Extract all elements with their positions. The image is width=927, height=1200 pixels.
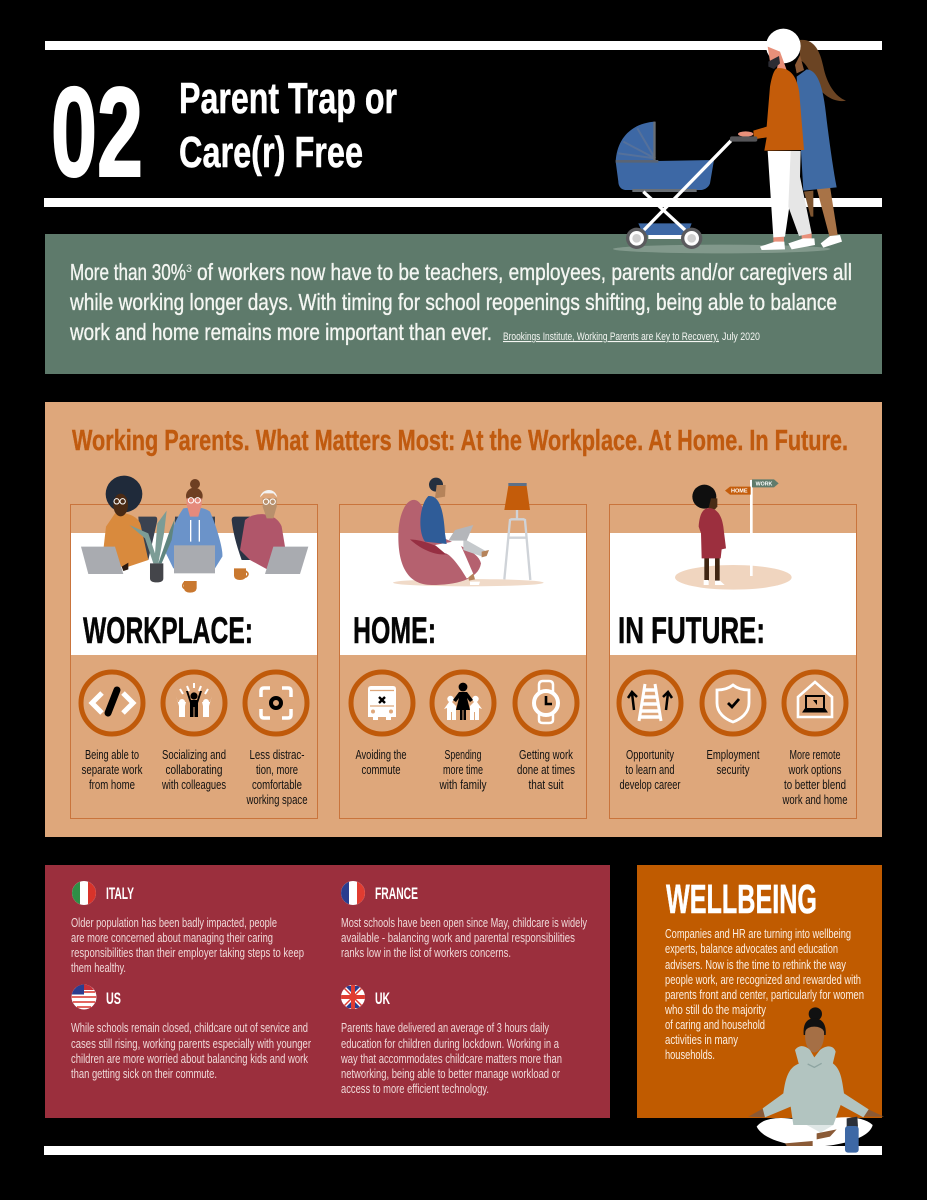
country: US: than getting sick on their commute. [71,1067,217,1081]
caption: less distraction: tion, more [256,763,298,777]
country: UK: Parents have delivered an average of 3 hours daily [341,1021,550,1035]
caption: family time [439,748,487,792]
icon: separate work from home [81,672,143,734]
caption: commute: commute [362,763,401,777]
country: Italy: ITALY [106,884,134,903]
panel: workplace [70,476,318,818]
icon: watch [515,672,577,734]
section number: 02 [51,61,143,203]
illustration: meditating woman [748,1007,884,1153]
illustration: person at signpost: HOME [731,489,748,495]
caption: flexible times: that suit [528,778,564,792]
title: Care(r) Free [179,128,363,177]
heading: workplace: WORKPLACE: [83,610,253,651]
panel: in future [610,479,856,818]
country: UK: networking, being able to better manage workload or [341,1067,560,1081]
caption: socializing: collaborating [166,763,223,777]
icon: Italy flag [72,881,96,905]
caption: flexible times: done at times [517,763,575,777]
caption: security [706,748,760,777]
country: US [71,989,311,1081]
country: Italy [71,884,304,975]
caption: socializing [161,748,226,792]
country: US: US [106,989,121,1008]
caption: commute: Avoiding the [356,748,407,762]
caption: family time: with family [439,778,487,792]
caption: separate work [82,748,143,792]
icon: remote work house [784,672,846,734]
illustration: person on beanbag [393,478,544,586]
panel: intro statement: July 2020 [722,331,760,343]
wellbeing text [664,927,864,1062]
caption: separate work: from home [89,778,135,792]
wellbeing text: parents front and center, particularly for women [665,988,864,1002]
wellbeing text: households. [665,1048,715,1062]
wellbeing text: activities in many [665,1033,739,1047]
illustration: person at signpost [675,479,792,590]
country: UK [340,989,562,1096]
country: Italy: are more concerned about managing their caring [71,931,273,945]
title [179,74,397,177]
icon: ladder [619,672,681,734]
icon: UK flag [341,985,365,1009]
country: France: available - balancing work and parental responsibilities [341,931,575,945]
caption: remote options: work and home [782,793,848,807]
panel: what matters most [45,402,882,837]
country: France: FRANCE [375,884,418,903]
panel: intro statement: 3 [186,263,192,275]
country: US: While schools remain closed, childcare out of service and [71,1021,308,1035]
country: Italy: them healthy. [71,961,126,975]
panel: wellbeing [637,865,882,1118]
country: UK: education for children during lockdown. Working in a [341,1037,559,1051]
caption: commute [356,748,407,777]
illustration: family with pram [613,29,846,253]
title: Parent Trap or [179,74,397,123]
caption: less distraction: comfortable [252,778,302,792]
caption: socializing: Socializing and [162,748,226,762]
icon: France flag [341,881,365,905]
icon: less distraction [245,672,307,734]
caption: separate work: separate work [82,763,143,777]
country: UK: UK [375,989,390,1008]
caption: family time: more time [443,763,483,777]
caption: remote options [782,748,848,807]
country: Italy: responsibilities than their employer taking steps to keep [71,946,304,960]
caption: flexible times: Getting work [519,748,574,762]
wellbeing text: Companies and HR are turning into wellbeing [665,927,851,941]
panel: intro statement [45,234,882,374]
country: UK: access to more efficient technology. [341,1082,489,1096]
country: France [341,884,588,960]
panel: intro statement: Brookings Institute, Working Parents are Key to Recovery, [503,331,719,343]
heading: in future: IN FUTURE: [618,610,765,651]
wellbeing text: experts, balance advocates and education [665,942,838,956]
caption: less distraction [246,748,308,807]
caption: less distraction: working space [246,793,308,807]
country: US: children are more worried about balancing kids and work [71,1052,309,1066]
wellbeing text: advisers. Now is the time to rethink the way [665,958,847,972]
panel: home [340,478,586,818]
caption: career: Opportunity [626,748,675,762]
wellbeing text: of caring and household [665,1018,765,1032]
caption: career [620,748,680,792]
caption: security: Employment [706,748,760,762]
country: US: cases still rising, working parents especially with younger [71,1037,311,1051]
panel: intro statement: work and home remains more important than ever. [69,319,492,345]
caption: family time: Spending [444,748,482,762]
icon: US flag [72,984,96,1010]
caption: flexible times [517,748,575,792]
panel: country insights [45,865,610,1118]
caption: career: to learn and [626,763,675,777]
caption: remote options: More remote [790,748,841,762]
caption: socializing: with colleagues [161,778,226,792]
illustration: colleagues at laptops [81,476,308,593]
wellbeing text: people work, are recognized and rewarded with [665,973,861,987]
wellbeing text: who still do the majority [664,1003,767,1017]
caption: career: develop career [620,778,680,792]
heading: home: HOME: [353,610,436,651]
country: Italy: Older population has been badly impacted, people [71,916,277,930]
country: France: ranks low in the list of workers concerns. [341,946,511,960]
icon: family [432,672,494,734]
country: UK: way that accommodates childcare matters more than [340,1052,562,1066]
illustration: person at signpost: WORK [756,481,772,487]
caption: remote options: work options [788,763,842,777]
icon: commute [351,672,413,734]
caption: less distraction: Less distrac- [250,748,304,762]
caption: security: security [716,763,750,777]
heading: wellbeing: WELLBEING [666,876,817,922]
panel: intro statement: More than 30% [70,259,186,285]
caption: remote options: to better blend [784,778,846,792]
caption: separate work: Being able to [85,748,139,762]
country: France: Most schools have been open since May, childcare is widely [341,916,588,930]
icon: socializing [163,672,225,734]
icon: shield [702,672,764,734]
